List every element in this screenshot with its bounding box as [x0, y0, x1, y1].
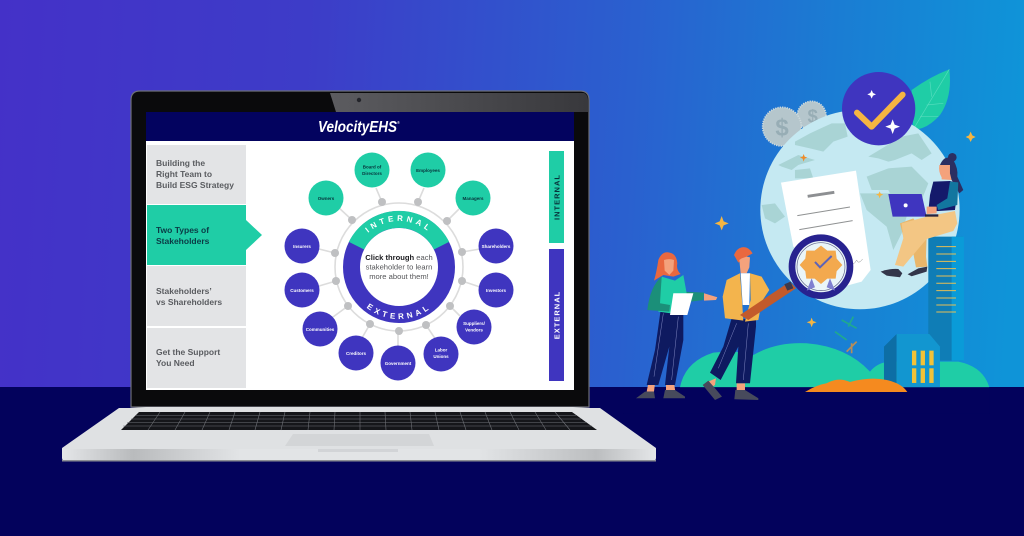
plant sprig [835, 317, 857, 353]
stakeholder wheel: Shareholders [482, 244, 511, 249]
laptop base [62, 407, 656, 462]
shoes [636, 390, 685, 398]
trousers [895, 211, 957, 267]
hair [734, 247, 753, 263]
floor strip over illustration [623, 387, 990, 414]
seated woman with laptop [881, 153, 963, 277]
menu item: stakeholders vs shareholders [147, 266, 246, 326]
face [939, 165, 952, 180]
stakeholder wheel: Board of [363, 164, 382, 170]
stakeholder wheel [284, 152, 514, 380]
screen header with logo: ® [397, 120, 400, 125]
orange mound [805, 379, 907, 392]
stakeholder wheel: Communities [306, 327, 335, 332]
certificate document [781, 171, 871, 287]
icon: coins: $ [775, 114, 789, 141]
laptop screen [146, 112, 574, 390]
internal stakeholders [308, 152, 490, 216]
central donut: INTERNAL [365, 215, 428, 232]
hair [654, 252, 681, 281]
screen header with logo [146, 112, 574, 141]
stakeholder wheel: Managers [462, 196, 484, 201]
internal side bar [549, 151, 564, 243]
centre prompt: Click through each [365, 253, 433, 262]
house [884, 334, 940, 387]
trousers [647, 310, 683, 385]
laptop [62, 90, 694, 462]
stakeholder wheel: Owners [318, 196, 335, 201]
jacket [723, 273, 743, 321]
top [658, 275, 687, 315]
icon: check badge [842, 72, 915, 145]
stakeholder wheel: Government [385, 361, 412, 366]
illustration: ESG people and globe [623, 69, 990, 414]
clipboard [670, 293, 693, 315]
stakeholder wheel: Suppliers/ [463, 321, 486, 326]
menu item: get the support [147, 328, 246, 388]
connector ring and spokes [319, 188, 480, 346]
central donut [343, 210, 455, 323]
laptop lid [131, 91, 589, 407]
shirt [741, 273, 750, 305]
external side bar: EXTERNAL [552, 291, 562, 339]
stakeholder wheel: Creditors [346, 351, 366, 356]
menu item: stakeholders vs shareholders: Stakeholders’ [156, 286, 212, 296]
hills [680, 343, 989, 387]
shoes [703, 381, 758, 400]
hand [704, 293, 717, 301]
magnifier handle [740, 282, 796, 320]
external side bar [549, 249, 564, 381]
shoes [881, 269, 902, 277]
stakeholder wheel: Investors [486, 288, 506, 293]
menu item: two types of stakeholders, active: Stakeholders [156, 236, 210, 246]
stakeholder wheel: Insurers [293, 244, 311, 249]
centre prompt: more about them! [369, 272, 429, 281]
menu item: two types of stakeholders, active: Two Types of [156, 225, 209, 235]
internal side bar: INTERNAL [552, 174, 562, 220]
magnifying glass with award badge [792, 238, 850, 296]
icon: leaf [912, 69, 950, 129]
far sleeve [683, 292, 704, 303]
menu item: get the support: You Need [156, 358, 195, 368]
woman with clipboard [636, 252, 717, 398]
front lip [62, 449, 656, 461]
menu item: two types of stakeholders, active [147, 205, 262, 265]
sidebar menu [147, 145, 262, 388]
navy floor band [0, 387, 1024, 536]
stakeholder wheel: Employees [416, 168, 440, 173]
menu item: building the team: Build ESG Strategy [156, 180, 234, 190]
stakeholder wheel: Directors [362, 171, 382, 176]
hair [940, 153, 963, 193]
tower [928, 237, 964, 361]
sleeve [937, 182, 958, 210]
face [739, 257, 750, 273]
near sleeve [647, 277, 670, 312]
central donut: EXTERNAL [366, 303, 429, 320]
external stakeholders [284, 228, 514, 380]
connector nodes [331, 198, 466, 335]
menu item: building the team: Right Team to [156, 169, 212, 179]
ankles [647, 383, 675, 392]
torso [928, 181, 958, 212]
face [664, 259, 674, 275]
stakeholder wheel: Customers [290, 288, 314, 293]
ankles [708, 378, 745, 392]
centre prompt: stakeholder to learn [366, 262, 432, 272]
menu item: stakeholders vs shareholders: vs Shareholders [156, 297, 222, 307]
trousers [710, 318, 756, 383]
menu item: building the team [147, 145, 246, 204]
sparkles [715, 132, 976, 327]
background gradient [0, 0, 1024, 388]
icon: coins: $ [807, 106, 818, 127]
menu item: get the support: Get the Support [156, 347, 220, 357]
man with magnifier [703, 247, 796, 400]
keyboard [121, 412, 597, 430]
back leg [900, 218, 927, 267]
globe [760, 110, 960, 309]
icon: coins [763, 101, 826, 146]
stakeholder wheel: Unions [433, 354, 449, 359]
centre prompt [365, 253, 433, 281]
screen header with logo: VelocityEHS [318, 119, 397, 136]
open laptop [888, 194, 927, 217]
menu item: building the team: Building the [156, 158, 205, 168]
stakeholder wheel: Vendors [465, 328, 483, 332]
trackpad [285, 434, 434, 446]
stakeholder wheel: Labor [435, 348, 447, 352]
